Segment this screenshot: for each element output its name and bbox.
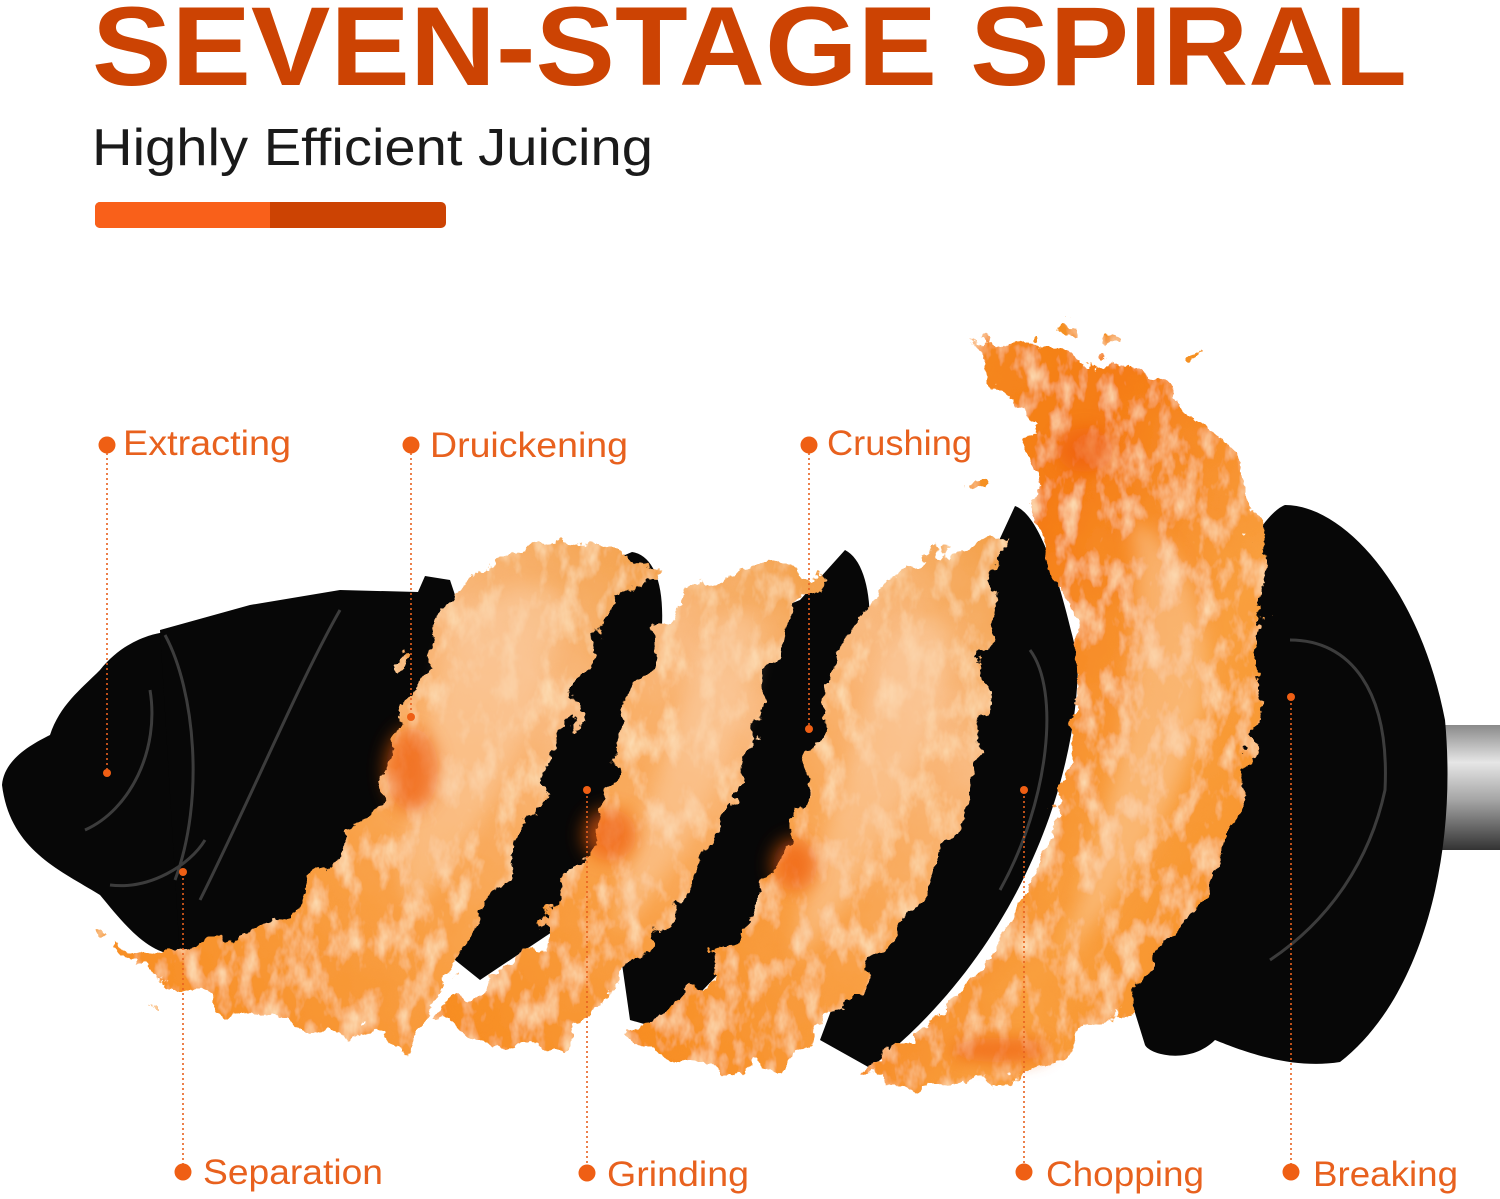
callout: Chopping: Chopping bbox=[1046, 1155, 1204, 1194]
callout: Grinding: Grinding bbox=[607, 1155, 749, 1194]
callout: Crushing bbox=[800, 424, 972, 733]
auger main body bbox=[160, 576, 470, 958]
callout: Separation: Separation bbox=[203, 1153, 383, 1192]
auger nose cone bbox=[2, 632, 215, 955]
subtitle: Highly Efficient Juicing bbox=[92, 119, 653, 177]
auger: black spiral body bbox=[2, 505, 1448, 1068]
callout: Extracting bbox=[98, 424, 291, 777]
juice swirl two bbox=[430, 563, 820, 1050]
callout: Druickening: Druickening bbox=[430, 426, 628, 465]
auger flange two bbox=[420, 552, 662, 980]
callout: Separation bbox=[174, 868, 383, 1192]
juice deep orange accents bbox=[386, 428, 1113, 1062]
callout: Breaking bbox=[1282, 693, 1458, 1194]
callout: Grinding bbox=[578, 786, 749, 1194]
juice swirl three bbox=[620, 541, 1005, 1068]
juice swirl four bbox=[860, 321, 1262, 1085]
rear disc bbox=[1100, 505, 1448, 1064]
accent bar bbox=[95, 202, 446, 228]
steel shaft bbox=[1430, 725, 1500, 850]
auger highlights bbox=[85, 610, 1385, 960]
callout: Breaking: Breaking bbox=[1313, 1155, 1458, 1194]
auger flange four bbox=[820, 506, 1078, 1068]
callout: Druickening bbox=[402, 426, 628, 721]
callout: Crushing: Crushing bbox=[827, 424, 972, 463]
juice highlights bbox=[403, 520, 1207, 960]
callout: Extracting: Extracting bbox=[123, 424, 291, 463]
auger flange three bbox=[620, 550, 870, 1030]
juice swirl one bbox=[95, 542, 655, 1040]
callout: Chopping bbox=[1016, 786, 1204, 1194]
